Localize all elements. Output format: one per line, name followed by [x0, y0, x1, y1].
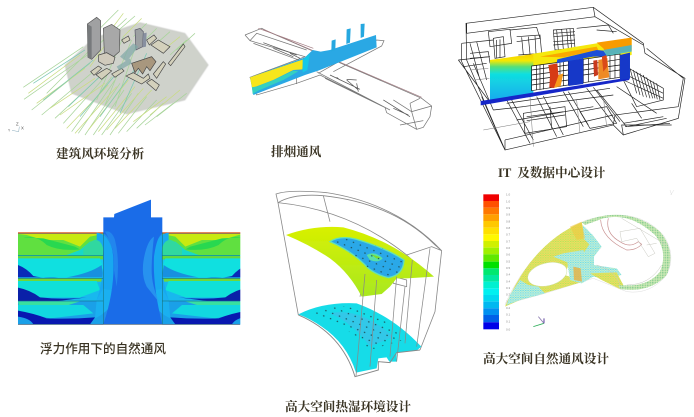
axis triad — [533, 317, 544, 327]
colour legend: 0.9 — [506, 213, 510, 217]
colour legend: 0.2 — [506, 306, 510, 310]
lower floor contour — [298, 303, 421, 373]
title: buoyancy natural ventilation: 浮力作用下的自然通风 — [40, 341, 166, 356]
contour slab — [490, 38, 632, 102]
colour legend: 0.0 — [506, 327, 510, 331]
colour legend: 0.4 — [506, 279, 510, 283]
colour legend: 0.5 — [506, 266, 510, 270]
colour legend — [483, 193, 510, 331]
title: smoke exhaust: 排烟通风 — [271, 144, 322, 159]
lower floor vents and edge — [298, 248, 430, 377]
axis indicator: Y — [8, 128, 11, 132]
wind streamlines — [23, 10, 195, 135]
colour legend: 1.0 — [506, 193, 510, 197]
smoke contour slice — [250, 24, 377, 95]
panel: smoke exhaust ventilation — [245, 24, 432, 159]
colour legend: 0.1 — [506, 319, 510, 323]
title: building wind environment: 建筑风环境分析 — [56, 146, 145, 161]
colour legend: 0.7 — [506, 233, 510, 237]
title: IT and data centre: IT 及数据中心设计 — [498, 165, 606, 180]
axis indicator: Z — [16, 122, 19, 127]
colour legend: 0.3 — [506, 293, 510, 297]
axis indicator: X — [21, 126, 24, 131]
panel: building wind environment analysis — [8, 10, 208, 161]
colour legend: 0.7 — [506, 239, 510, 243]
title: heat and humidity environment: 高大空间热湿环境设计 — [285, 399, 411, 414]
colour legend: 0.5 — [506, 259, 510, 263]
blue contour band — [481, 45, 632, 105]
buildings — [87, 17, 185, 91]
colour legend: 0.1 — [506, 313, 510, 317]
velocity field plan — [505, 190, 674, 327]
colour legend: 0.6 — [506, 246, 510, 250]
building section contour — [18, 200, 260, 330]
colour legend: 0.4 — [506, 273, 510, 277]
building wireframe — [458, 7, 685, 150]
colour legend: 0.8 — [506, 226, 510, 230]
wireframe shell — [276, 191, 442, 350]
colour legend: 0.2 — [506, 299, 510, 303]
panel: IT and data centre design — [458, 7, 685, 180]
upper floor vents — [330, 238, 404, 278]
panel: large-space natural ventilation design — [483, 190, 674, 331]
colour legend: 1.0 — [506, 199, 510, 203]
colour legend: 0.3 — [506, 286, 510, 290]
tunnel wireframe — [245, 28, 432, 129]
colour legend: 0.9 — [506, 206, 510, 210]
colour legend: 0.8 — [506, 219, 510, 223]
colour legend: 0.6 — [506, 253, 510, 257]
axis indicator — [8, 122, 24, 132]
panel: large-space heat and humidity environment — [276, 191, 442, 414]
site ground polygon — [65, 23, 208, 114]
upper floor contour — [286, 227, 434, 297]
title: natural ventilation design: 高大空间自然通风设计 — [483, 351, 609, 366]
panel: natural ventilation under buoyancy — [18, 200, 260, 356]
ventilation openings — [532, 54, 620, 91]
